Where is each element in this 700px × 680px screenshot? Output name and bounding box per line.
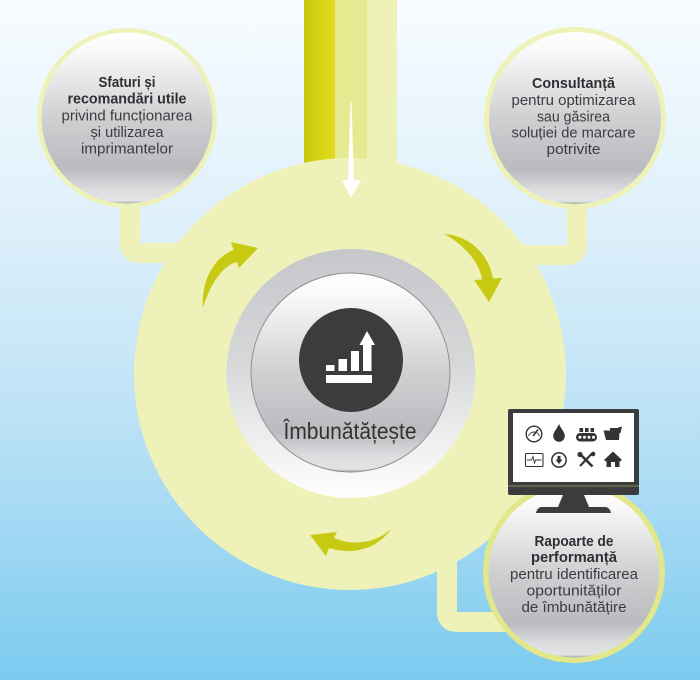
- hub outer ring: [226, 249, 476, 498]
- advice text: recomandări utile: [68, 90, 186, 108]
- consulting text: [512, 75, 636, 158]
- monitor screen: [513, 413, 634, 482]
- connector: bottom bubble to main circle: [447, 540, 510, 622]
- icon: white down arrow: [342, 102, 361, 198]
- consulting text: soluției de marcare: [512, 124, 636, 142]
- consulting text: sau găsirea: [537, 108, 611, 126]
- consulting text: potrivite: [546, 141, 600, 158]
- icon: house: [604, 452, 622, 467]
- connector: right bubble to main circle: [500, 200, 577, 255]
- monitor body: [508, 409, 639, 495]
- icon: ink drop: [553, 424, 565, 442]
- reports text: oportunităților: [526, 582, 622, 600]
- advice text: imprimantelor: [81, 140, 173, 158]
- panel: reports bubble: [483, 481, 665, 663]
- consulting text: pentru optimizarea: [512, 92, 636, 109]
- arrow: cycle bottom: [310, 528, 392, 556]
- arrow: cycle top right: [444, 234, 502, 302]
- icon: conveyor: [576, 428, 597, 442]
- consulting text: Consultanță: [532, 75, 616, 92]
- icon: folder: [604, 426, 622, 440]
- hub label: Îmbunătățește: [283, 418, 416, 444]
- advice text: [62, 74, 193, 158]
- reports text: [510, 533, 639, 616]
- hub silver disc: [251, 273, 450, 472]
- main pale circle: [134, 158, 566, 590]
- panel: consulting bubble: [484, 27, 666, 209]
- reports text: pentru identificarea: [510, 566, 639, 583]
- advice text: privind funcționarea: [62, 108, 193, 124]
- reports text: de îmbunătățire: [522, 599, 626, 616]
- icon: tools: [577, 452, 595, 466]
- advice text: și utilizarea: [90, 124, 164, 141]
- arrow: cycle top left: [203, 242, 258, 308]
- panel: advice bubble: [37, 28, 217, 208]
- monitor with dashboard icons: [508, 409, 639, 513]
- icon: download: [552, 453, 566, 467]
- vertical input bands: [304, 0, 397, 175]
- connector: left bubble to main circle: [130, 200, 190, 253]
- reports text: Rapoarte de: [534, 533, 614, 550]
- reports text: performanță: [531, 549, 618, 566]
- advice text: Sfaturi și: [98, 74, 156, 91]
- icon: pulse screen: [526, 454, 543, 466]
- icon: growth chart: [299, 308, 403, 412]
- monitor stand: [536, 495, 611, 513]
- icon: gauge: [526, 426, 542, 442]
- central hub: [226, 249, 476, 498]
